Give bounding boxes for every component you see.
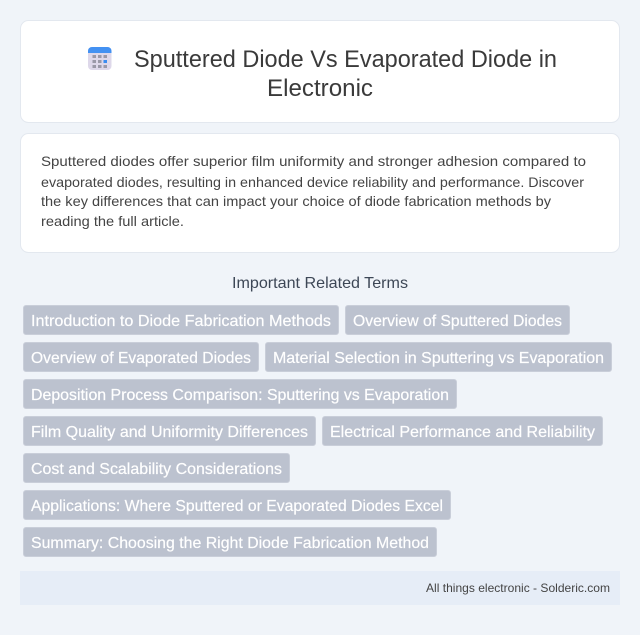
tag: sputtered overview: Overview of Sputtered Diodes — [353, 313, 562, 330]
icon: calendar — [88, 47, 112, 70]
tag: material selection: Material Selection in Sputtering vs Evaporation — [273, 350, 604, 367]
intro text: the key differences that can impact your choice of diode fabrication methods by — [41, 193, 551, 209]
title: Sputtered Diode Vs Evaporated Diode in — [134, 46, 557, 73]
section heading: Important Related Terms — [232, 275, 408, 292]
tag: film quality — [24, 416, 316, 446]
tag: deposition process: Deposition Process Comparison: Sputtering vs Evaporation — [31, 387, 449, 404]
tag: evaporated overview — [24, 342, 258, 372]
tag: introduction: Introduction to Diode Fabrication Methods — [31, 313, 331, 330]
tag: electrical performance — [322, 416, 602, 446]
tag: applications — [24, 490, 450, 520]
header panel — [20, 20, 620, 122]
tag: introduction — [24, 306, 338, 334]
tag: sputtered overview — [346, 306, 570, 334]
related terms tags — [24, 306, 612, 556]
intro text: reading the full article. — [41, 213, 184, 229]
tag: evaporated overview: Overview of Evaporated Diodes — [31, 350, 251, 367]
intro text: evaporated diodes, resulting in enhanced device reliability and performance. Discover — [41, 174, 584, 190]
intro text: Sputtered diodes offer superior film uniformity and stronger adhesion compared to — [41, 153, 586, 169]
footer — [20, 571, 620, 605]
tag: applications: Applications: Where Sputtered or Evaporated Diodes Excel — [31, 498, 443, 515]
footer: All things electronic - Solderic.com — [426, 581, 610, 595]
tag: cost — [24, 454, 290, 482]
tag: summary: Summary: Choosing the Right Diode Fabrication Method — [31, 535, 429, 552]
tag: electrical performance: Electrical Performance and Reliability — [330, 424, 595, 441]
tag: deposition process — [24, 380, 456, 408]
intro text — [41, 153, 586, 229]
tag: film quality: Film Quality and Uniformity Differences — [31, 424, 308, 441]
tag: material selection — [266, 342, 612, 372]
title: Electronic — [267, 75, 373, 102]
tag: summary — [24, 528, 436, 556]
title — [134, 46, 557, 102]
tag: cost: Cost and Scalability Considerations — [31, 461, 282, 478]
intro panel — [20, 134, 620, 252]
